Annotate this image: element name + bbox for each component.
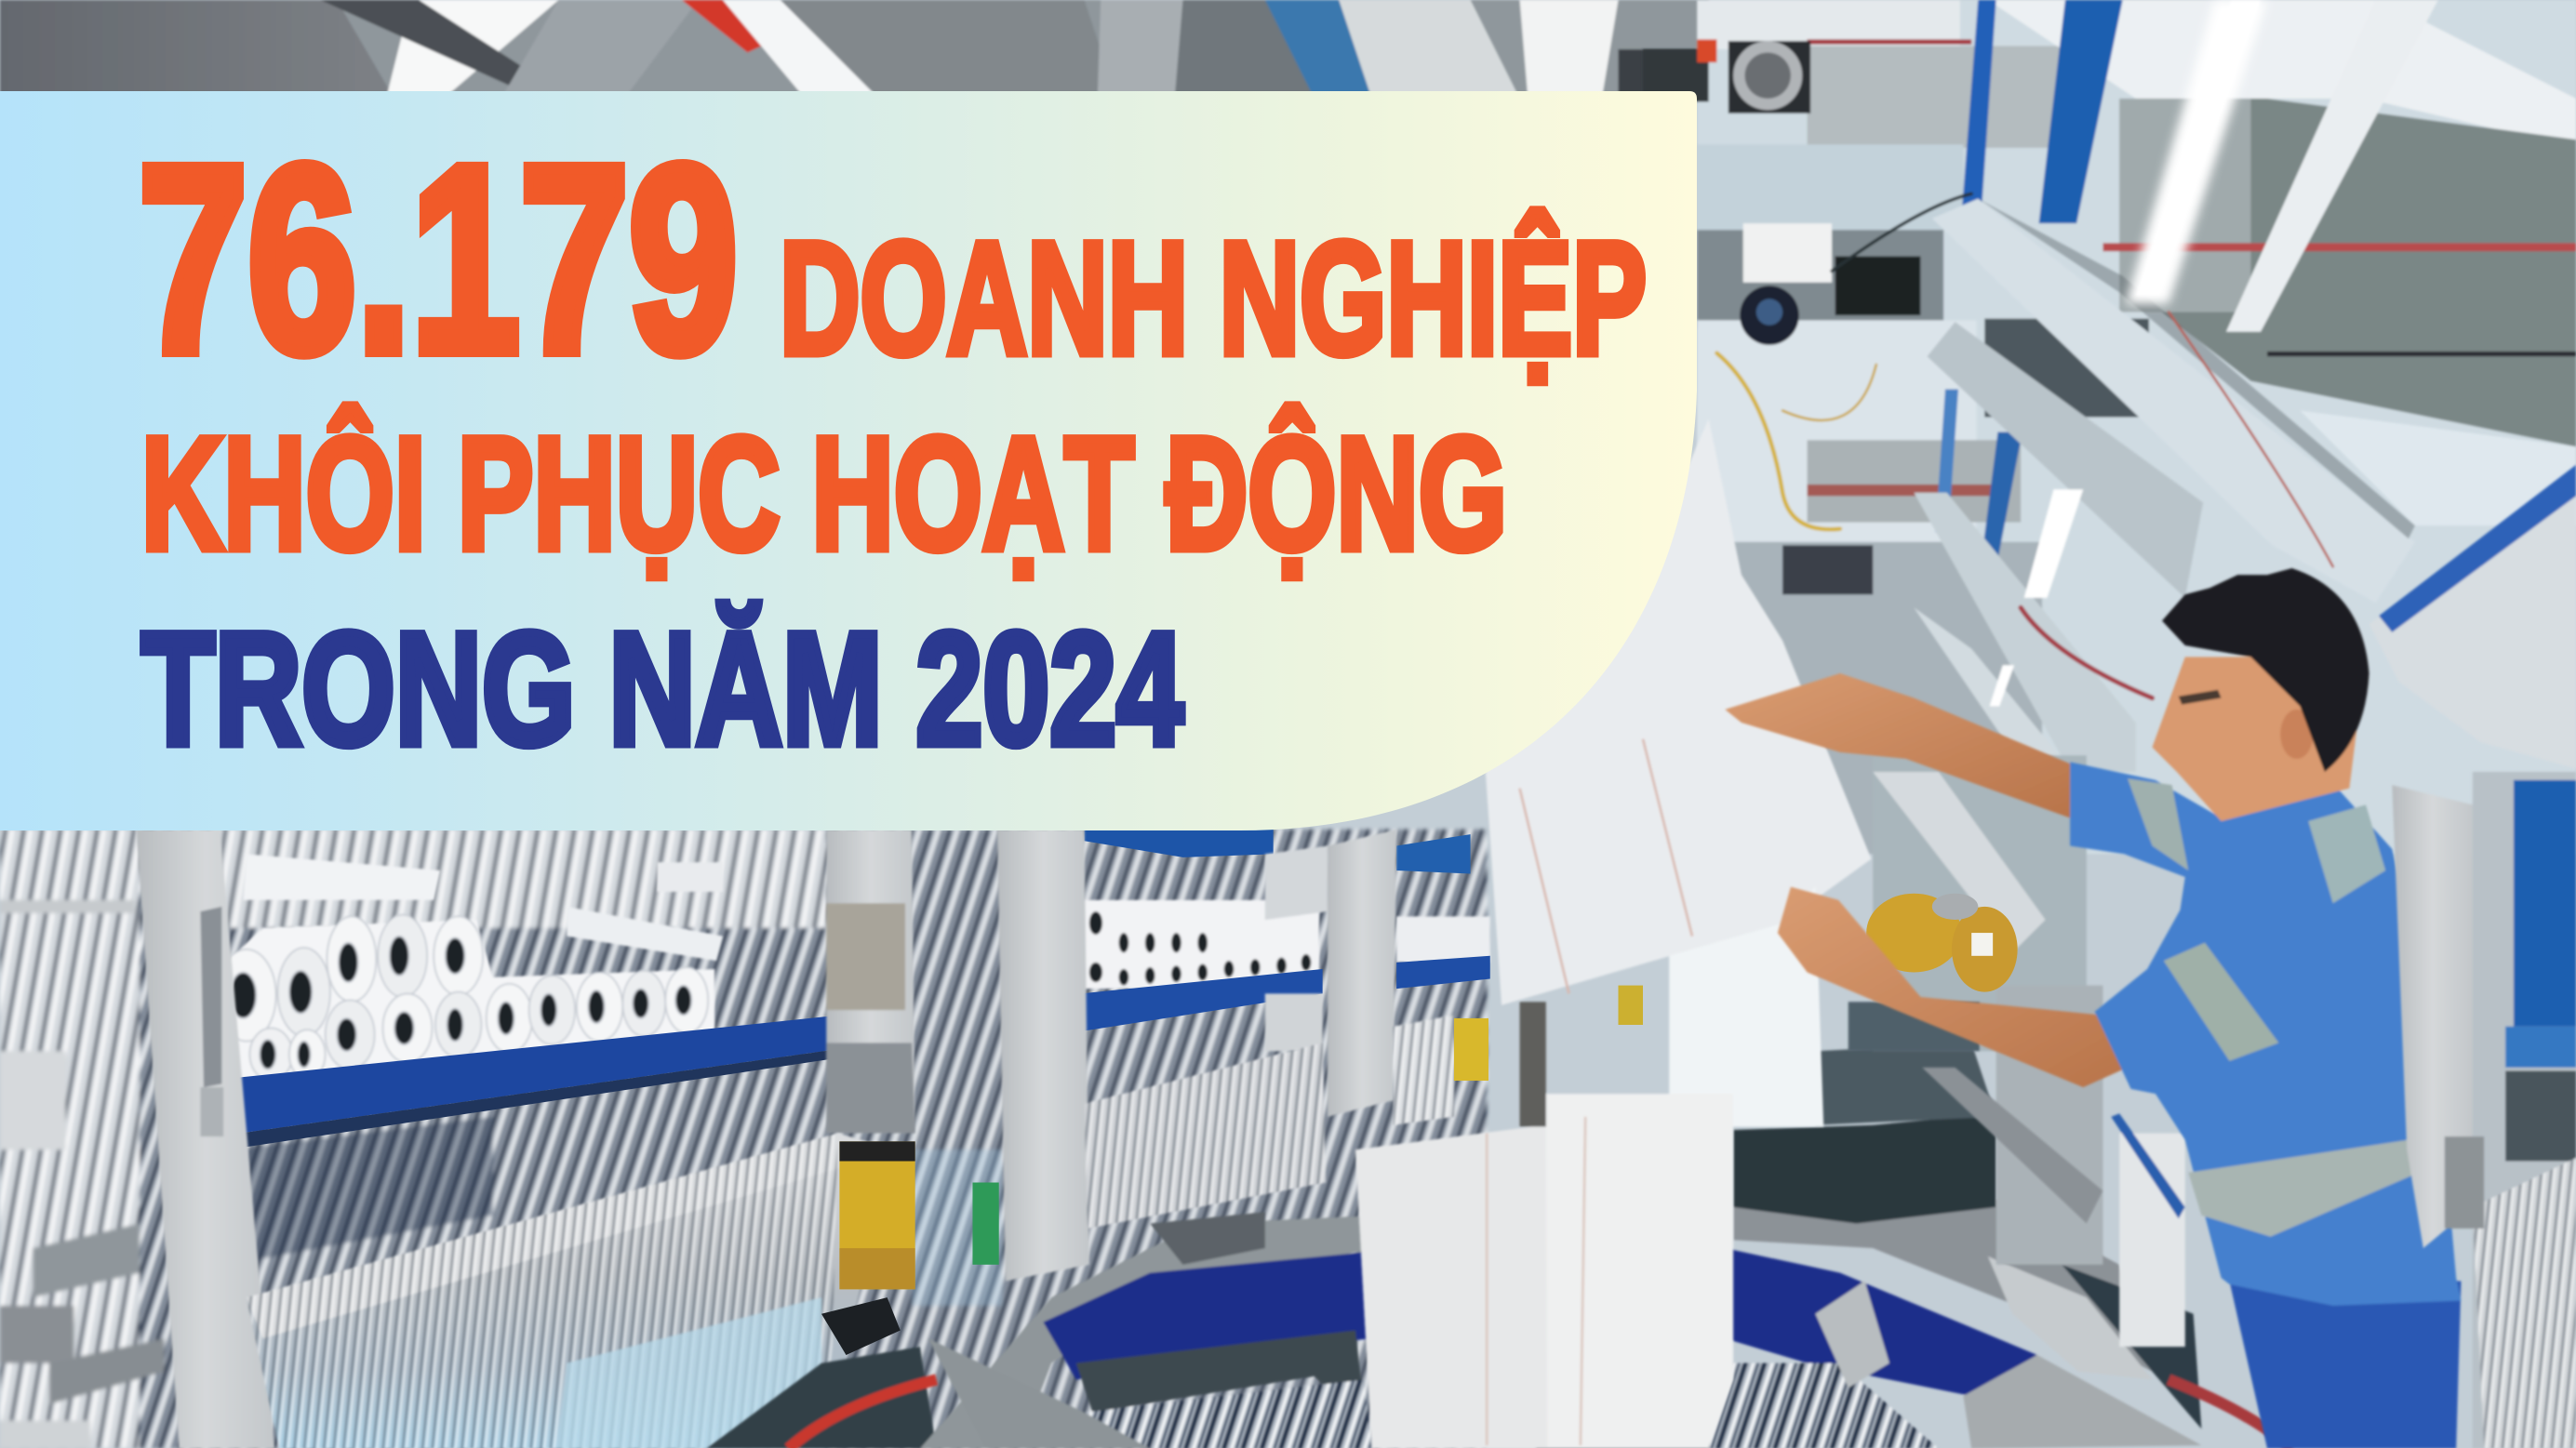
hair <box>2162 568 2369 772</box>
title panel: gradient background with curved corner <box>0 91 1697 830</box>
neck and face <box>2152 657 2366 821</box>
title: second line: KHÔI PHỤC HOẠT ĐỘNG <box>141 405 1507 583</box>
circular loom <box>706 1043 2292 1448</box>
machine pillars <box>137 830 1396 1448</box>
large yarn beam, left <box>247 1134 895 1448</box>
blue shelves <box>223 830 1490 1149</box>
shoulder reflective stripe <box>2128 778 2188 870</box>
machine parts below motors <box>1782 545 1873 594</box>
blue ceiling bars <box>1935 0 2123 560</box>
title: third line: TRONG NĂM 2024 <box>141 600 1183 778</box>
upper arm <box>1725 673 2070 817</box>
title: big number and first line: 76.179 <box>139 112 738 407</box>
large diagonal beams <box>1914 199 2415 789</box>
worker <box>1725 568 2461 1448</box>
cables <box>1716 193 2333 698</box>
waist reflective stripe <box>2188 1135 2441 1237</box>
collar band <box>2308 804 2385 903</box>
right side machine and pillars <box>2369 465 2576 1448</box>
white spools on first shelf <box>217 915 714 1084</box>
black motor <box>1740 256 1920 345</box>
title: big number and first line <box>139 112 1647 407</box>
title: big number and first line: DOANH NGHIỆP <box>780 209 1647 388</box>
ear <box>2280 710 2314 759</box>
ceiling structure at right <box>1643 0 2576 854</box>
white control box <box>1743 223 1832 283</box>
middle rack between bag and worker <box>1849 755 2185 1347</box>
sleeve reflective stripe <box>2164 943 2278 1061</box>
eyebrow <box>2179 690 2222 705</box>
lower arm <box>1778 887 2131 1087</box>
yellow tensioner tubes <box>821 986 1643 1355</box>
icon: cooling fans <box>1643 39 1810 113</box>
ceiling light tubes <box>1990 0 2267 706</box>
white fabric bag being lifted <box>1355 418 1871 1448</box>
yarn rack background, lower left <box>0 830 1487 1448</box>
blue shirt <box>2070 762 2461 1306</box>
ceiling strip above the title panel <box>0 0 1709 99</box>
yarn beam, centre <box>1085 1015 1454 1229</box>
upper spool row behind first shelf <box>243 854 723 961</box>
golden yarn reels <box>1866 894 2018 992</box>
white spools second rack <box>1081 900 1490 989</box>
trousers <box>2229 1281 2461 1448</box>
white diagonal beam <box>2226 0 2438 332</box>
